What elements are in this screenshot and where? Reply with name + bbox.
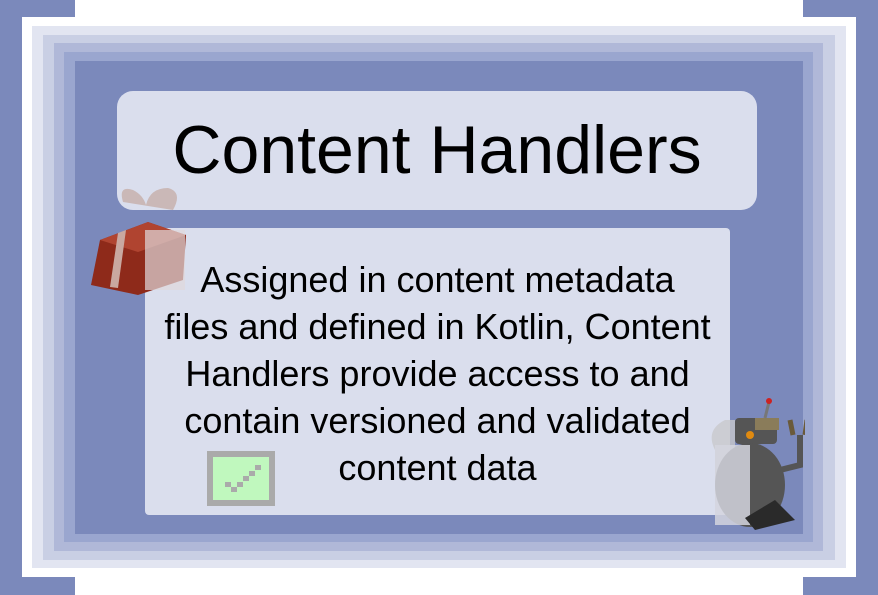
corner bracket: right: [803, 0, 878, 595]
icon: checkbox: [207, 451, 275, 506]
title: Content Handlers: [172, 112, 702, 188]
title: [117, 91, 757, 210]
icon: gift: [91, 188, 186, 295]
body text panel: Assigned in content metadata: [200, 259, 675, 300]
body text panel: [145, 228, 730, 515]
body text panel: Handlers provide access to and: [185, 353, 690, 394]
body text panel: files and defined in Kotlin, Content: [164, 306, 711, 347]
icon: robot: [712, 398, 805, 530]
body text panel: content data: [338, 447, 537, 488]
corner bracket: left: [0, 0, 75, 595]
body text panel: contain versioned and validated: [184, 400, 691, 441]
